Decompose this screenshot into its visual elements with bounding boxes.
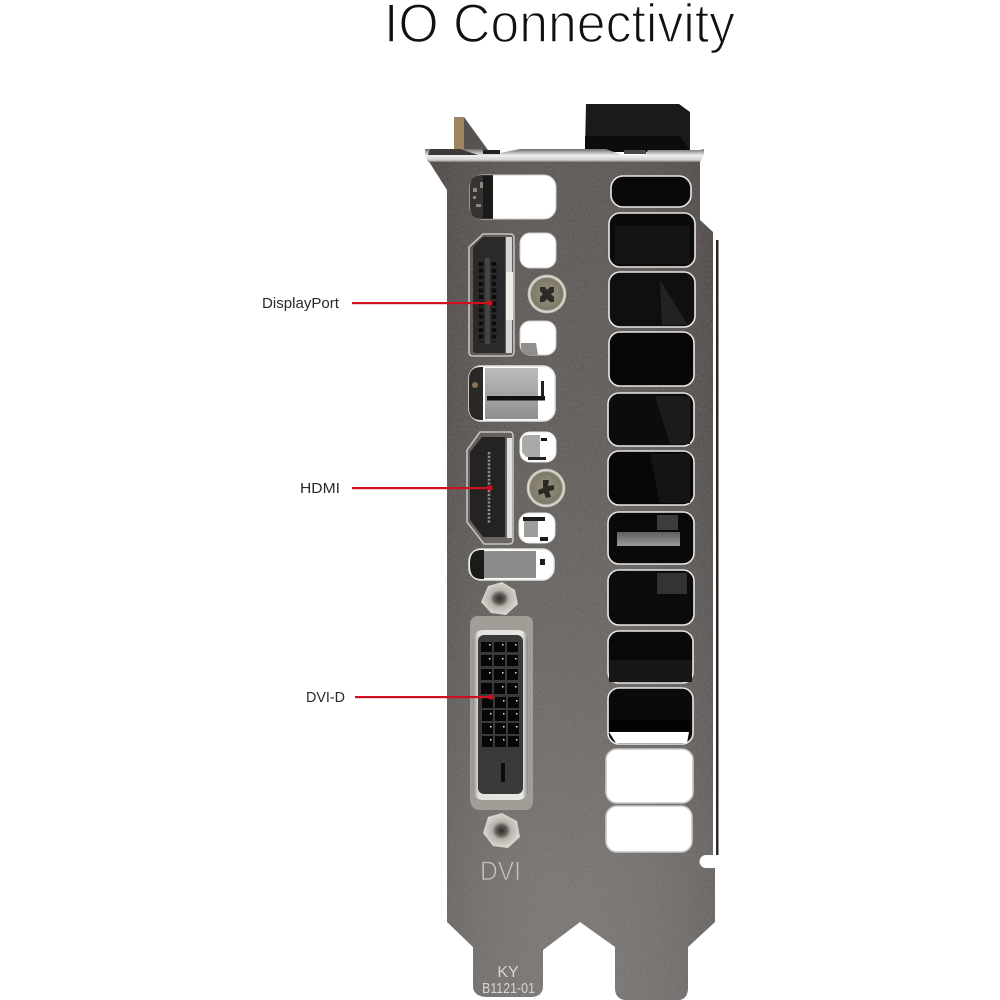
bracket assembly	[425, 104, 718, 1000]
hdmi connector	[467, 432, 513, 544]
embossed dvi text: DVI	[480, 856, 521, 886]
displayport connector	[469, 234, 514, 356]
displayport pins	[481, 262, 494, 342]
callout: HDMI	[300, 481, 493, 497]
screw: hdmi	[526, 468, 566, 508]
lower opening	[469, 549, 554, 580]
top lip of bracket	[425, 149, 704, 162]
displayport upper square hole	[520, 233, 556, 268]
callout: DisplayPort	[262, 296, 493, 312]
vent slot 4	[609, 332, 694, 386]
upper small hole by hdmi	[520, 432, 556, 462]
hex standoff: dvi top	[481, 582, 518, 615]
vent slot 3	[609, 272, 695, 327]
callout: DVI-D	[306, 690, 494, 706]
vent slot 8	[608, 570, 694, 625]
displayport lower square hole	[520, 321, 556, 355]
vent slot 5	[608, 393, 694, 446]
embossed part code: KY	[497, 964, 519, 981]
vent slot 6	[608, 451, 694, 505]
right vent column	[606, 176, 695, 852]
dvi pin grid	[481, 642, 519, 747]
vent slot 11	[606, 749, 693, 803]
vent slot 10	[608, 688, 693, 744]
interior details seen through vents	[609, 226, 692, 743]
dvi pin highlights	[489, 644, 518, 740]
black connector block behind bracket	[585, 104, 690, 152]
lower small hole by hdmi	[519, 513, 555, 543]
hdmi pins	[488, 452, 490, 523]
callout: HDMI: HDMI	[300, 481, 340, 497]
hex standoff: dvi bottom	[483, 813, 520, 848]
vent slot 1	[611, 176, 691, 207]
embossed part number: B1121-01	[482, 980, 535, 997]
callout: DVI-D: DVI-D	[306, 690, 345, 706]
bracket plate	[428, 160, 715, 1000]
vent slot 9	[608, 631, 693, 683]
vent slot 2	[609, 213, 695, 267]
screw: displayport	[527, 274, 567, 314]
top opening	[470, 175, 556, 219]
rear right edge strip	[716, 240, 718, 855]
circuit board edge behind bracket	[454, 117, 488, 153]
dvi connector	[470, 616, 533, 810]
middle opening	[469, 366, 555, 421]
callout: DisplayPort: DisplayPort	[262, 296, 339, 312]
vent slot 12	[606, 806, 692, 852]
vent slot 7	[608, 512, 694, 564]
